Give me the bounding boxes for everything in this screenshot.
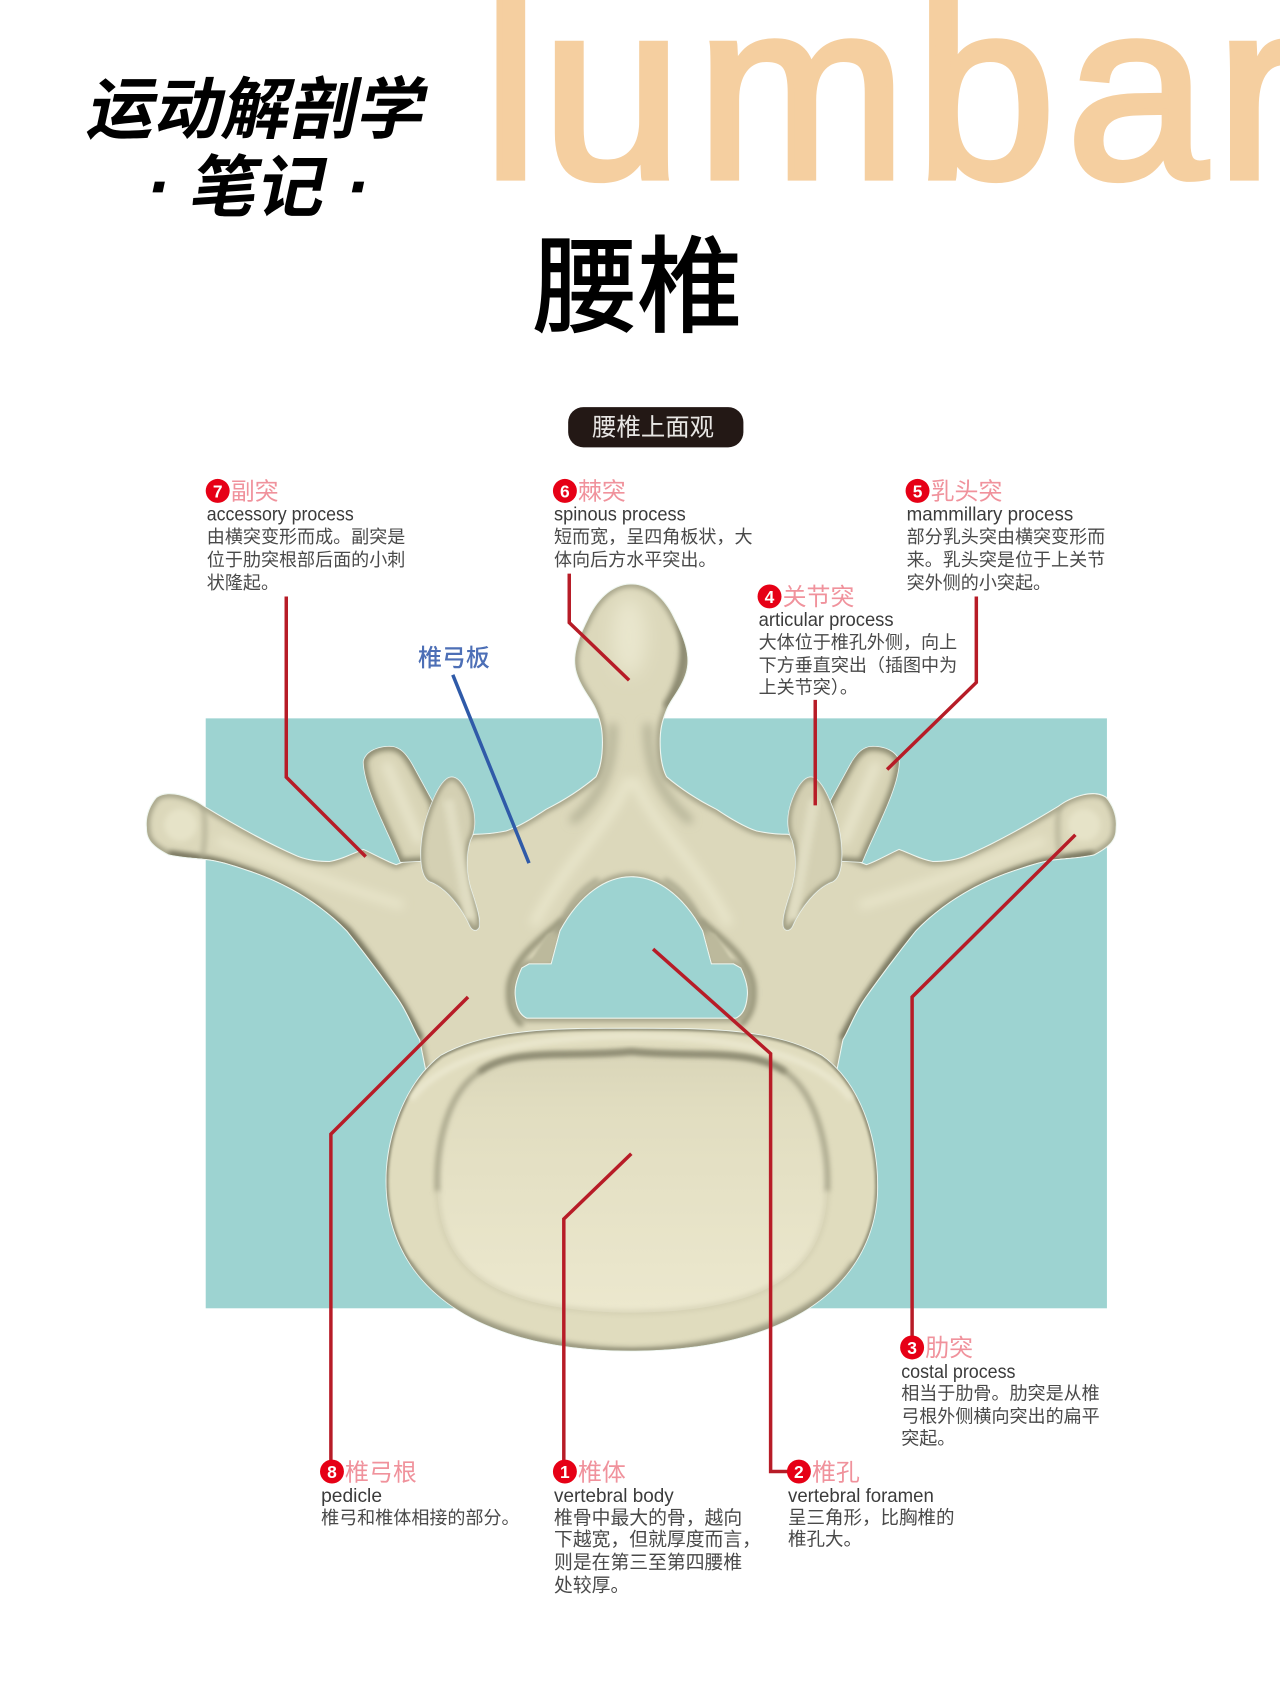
callout 5 mammillary process bbox=[906, 472, 1105, 595]
callout 1 vertebral body: 椎体 bbox=[578, 1452, 626, 1487]
callout 8 pedicle bbox=[320, 1452, 520, 1530]
mammillary processes bbox=[364, 747, 899, 862]
callout 1 vertebral body: 则是在第三至第四腰椎 bbox=[554, 1547, 742, 1574]
callout 7 accessory process: 7 bbox=[213, 481, 223, 501]
callout 7 accessory process: 副突 bbox=[231, 472, 279, 507]
callout 8 pedicle: pedicle bbox=[321, 1486, 382, 1507]
title: 运动解剖学笔记: · bbox=[140, 147, 181, 227]
callout 8 pedicle: 椎弓根 bbox=[345, 1452, 417, 1487]
leader line 6 bbox=[569, 574, 629, 680]
callout 3 costal process bbox=[900, 1328, 1100, 1450]
callout 3 costal process: 弓根外侧横向突出的扁平 bbox=[901, 1403, 1100, 1429]
title: 运动解剖学笔记 bbox=[81, 55, 439, 231]
callout 1 vertebral body bbox=[553, 1452, 761, 1597]
callout 1 vertebral body: 处较厚。 bbox=[554, 1570, 629, 1597]
heading: 腰椎: 腰椎 bbox=[533, 203, 742, 354]
leader line 1 bbox=[564, 1154, 631, 1463]
callout 7 accessory process: 状隆起。 bbox=[207, 569, 279, 595]
callout 3 costal process: 肋突 bbox=[925, 1328, 973, 1363]
callout 7 accessory process: 由横突变形而成。副突是 bbox=[207, 523, 405, 549]
callout 1 vertebral body: 椎骨中最大的骨，越向 bbox=[554, 1503, 742, 1530]
callout 1 vertebral body: 1 bbox=[560, 1462, 570, 1482]
callout 2 vertebral foramen: 呈三角形，比胸椎的 bbox=[788, 1504, 955, 1530]
pill: view label: 腰椎上面观 bbox=[592, 408, 714, 443]
callout 4 articular process: 上关节突）。 bbox=[759, 673, 858, 699]
callout 1 vertebral body: vertebral body bbox=[554, 1486, 674, 1507]
callout 4 articular process: 关节突 bbox=[783, 577, 854, 612]
callout 5 mammillary process: 部分乳头突由横突变形而 bbox=[907, 523, 1105, 549]
callout 8 pedicle: 椎弓和椎体相接的部分。 bbox=[321, 1504, 520, 1530]
callout 4 articular process bbox=[758, 577, 957, 699]
leader line 5 bbox=[887, 596, 976, 770]
callout 2 vertebral foramen: 椎孔大。 bbox=[788, 1526, 862, 1552]
leader line 3 bbox=[912, 835, 1075, 1339]
leader line 4 bbox=[814, 700, 817, 805]
callout 3 costal process: 相当于肋骨。肋突是从椎 bbox=[901, 1380, 1100, 1406]
title: 运动解剖学笔记: 运动解剖学 bbox=[81, 55, 439, 153]
callout 5 mammillary process: 突外侧的小突起。 bbox=[907, 569, 1051, 595]
callout 2 vertebral foramen: 2 bbox=[794, 1462, 804, 1482]
title: 运动解剖学笔记: 笔记 bbox=[183, 133, 339, 231]
pill: view label bbox=[568, 407, 743, 447]
callout 6 spinous process bbox=[553, 472, 753, 572]
callout 8 pedicle: 8 bbox=[327, 1462, 337, 1482]
callout 4 articular process: 大体位于椎孔外侧，向上 bbox=[759, 629, 957, 655]
callout 7 accessory process: 位于肋突根部后面的小刺 bbox=[207, 546, 405, 572]
title: 运动解剖学笔记: · bbox=[339, 147, 380, 227]
callout 6 spinous process: 6 bbox=[560, 481, 570, 501]
callout 3 costal process: 3 bbox=[907, 1338, 917, 1358]
callout 4 articular process: 下方垂直突出（插图中为 bbox=[759, 652, 957, 678]
vertebral body bbox=[386, 1029, 877, 1351]
leader line 2 bbox=[653, 949, 790, 1472]
callout 7 accessory process bbox=[206, 472, 405, 595]
callout 6 spinous process: 体向后方水平突出。 bbox=[554, 546, 716, 572]
label: 椎弓板: 椎弓板 bbox=[418, 638, 490, 673]
callout 2 vertebral foramen: 椎孔 bbox=[812, 1452, 860, 1487]
callout 7 accessory process: accessory process bbox=[207, 504, 354, 525]
teal background panel bbox=[206, 718, 1107, 1308]
callout 3 costal process: 突起。 bbox=[901, 1424, 955, 1450]
callout 6 spinous process: spinous process bbox=[554, 504, 686, 525]
articular processes bbox=[421, 777, 842, 930]
leader line 7 bbox=[286, 596, 366, 857]
callout 6 spinous process: 短而宽，呈四角板状，大 bbox=[554, 523, 753, 549]
callout 4 articular process: 4 bbox=[765, 587, 775, 607]
callout 2 vertebral foramen bbox=[787, 1452, 955, 1552]
vertebra illustration bbox=[147, 584, 1116, 1351]
callout 5 mammillary process: 5 bbox=[913, 481, 923, 501]
callout 6 spinous process: 棘突 bbox=[578, 472, 626, 507]
callout 5 mammillary process: 乳头突 bbox=[931, 472, 1002, 507]
callout 3 costal process: costal process bbox=[901, 1362, 1016, 1383]
callout 5 mammillary process: 来。乳头突是位于上关节 bbox=[907, 546, 1105, 572]
callout 2 vertebral foramen: vertebral foramen bbox=[788, 1486, 934, 1507]
callout 4 articular process: articular process bbox=[759, 610, 894, 631]
leader line lamina bbox=[453, 675, 529, 863]
vertebral arch and transverse processes bbox=[147, 584, 1116, 1088]
leader line 8 bbox=[331, 997, 468, 1463]
callout 1 vertebral body: 下越宽，但就厚度而言， bbox=[554, 1525, 761, 1552]
callout 5 mammillary process: mammillary process bbox=[907, 504, 1073, 525]
